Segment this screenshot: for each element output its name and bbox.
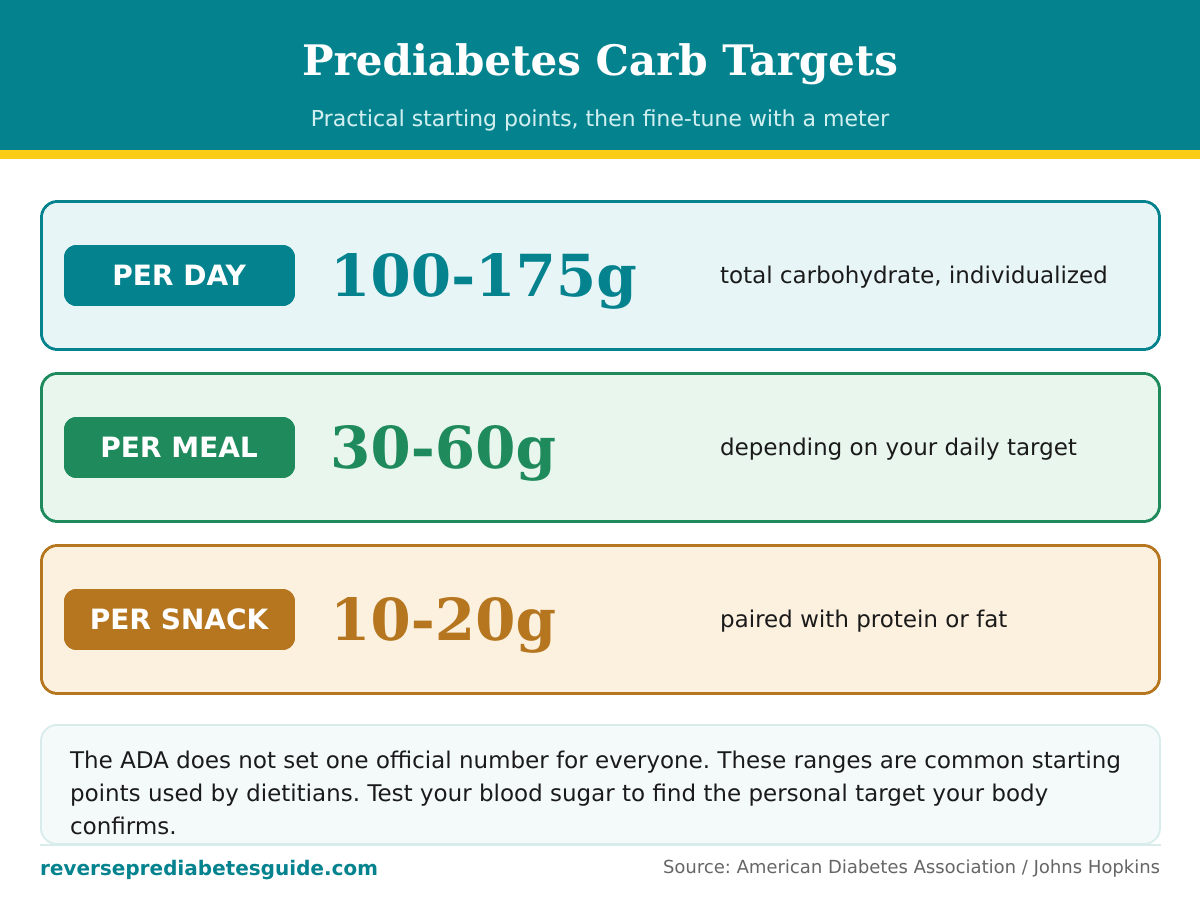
value: per day: 100-175g [330,242,637,310]
header banner [0,0,1200,159]
panel: per day [42,202,1160,350]
label: per meal: PER MEAL [100,431,258,464]
note callout: confirms. [70,814,177,840]
value: per snack: 10-20g [330,586,556,654]
note callout [41,725,1160,844]
note callout: points used by dietitians. Test your blood sugar to find the personal target your body [70,781,1048,807]
description: per day: total carbohydrate, individualized [720,263,1108,289]
label: per day: PER DAY [112,259,246,292]
panel: per meal [42,374,1160,522]
title: Prediabetes Carb Targets [302,36,898,85]
value: per meal: 30-60g [330,414,556,482]
description: per snack: paired with protein or fat [720,607,1007,633]
label: per meal [64,417,295,478]
subtitle: Practical starting points, then fine-tune with a meter [311,107,890,132]
label: per snack [64,589,295,650]
panel: per snack [42,546,1160,694]
footer source: Source: American Diabetes Association / Johns Hopkins [663,857,1160,878]
note callout: The ADA does not set one official number for everyone. These ranges are common starting [69,748,1121,774]
label: per snack: PER SNACK [90,603,270,636]
footer website: reverseprediabetesguide.com [40,856,378,880]
description: per meal: depending on your daily target [720,435,1077,461]
label: per day [64,245,295,306]
